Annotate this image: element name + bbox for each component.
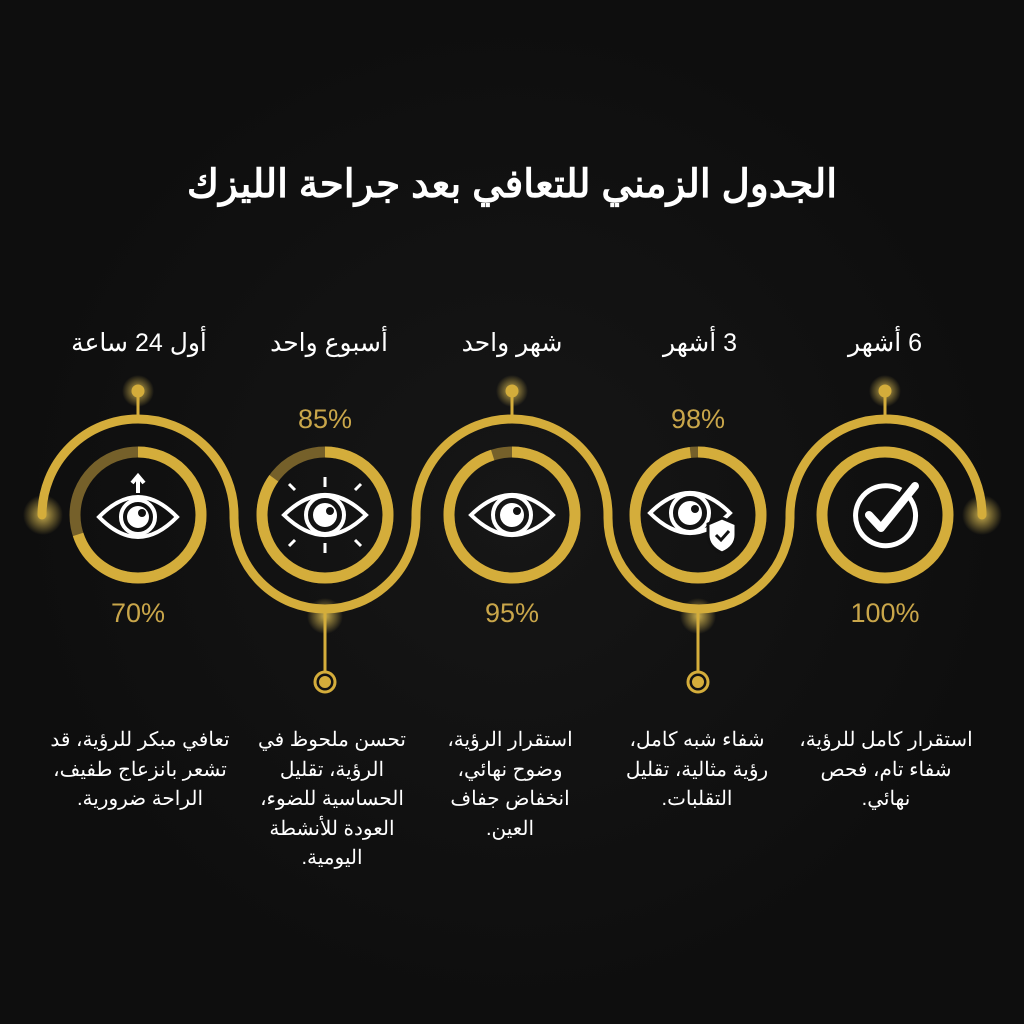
description 2: الرؤية، تقليل [280,758,384,780]
progress ring 5 [822,452,948,578]
description 2: تحسن ملحوظ في [258,729,406,751]
percent 70: 70% [111,598,165,628]
wave path [23,375,1002,692]
description 4: التقلبات. [662,788,732,810]
description 2: الحساسية للضوء، [260,788,404,810]
description 5: استقرار كامل للرؤية، [799,729,973,751]
description 3 [447,729,573,840]
description 4: شفاء شبه كامل، [630,729,764,751]
description 2: العودة للأنشطة [269,818,395,840]
percent 98: 98% [671,404,725,434]
description 1: تعافي مبكر للرؤية، قد [50,729,230,751]
heading: one week: أسبوع واحد [270,329,388,357]
icon: eye with shield [650,493,736,553]
icon: eye [471,495,553,535]
percent 100: 100% [850,598,920,628]
description 3: استقرار الرؤية، [447,729,573,751]
icon: check circle [856,486,916,546]
progress ring 2 [262,452,388,578]
description 2: اليومية. [301,847,363,869]
icon: eye with arrow [99,476,177,537]
description 5 [799,729,973,810]
icon: eye with rays [284,477,366,553]
description 3: العين. [486,818,534,840]
heading: 24 hours: أول 24 ساعة [71,329,207,357]
description 1: تشعر بانزعاج طفيف، [53,758,227,780]
progress ring 3 [449,452,575,578]
heading: 6 months: 6 أشهر [848,329,922,357]
description 1 [50,729,230,810]
progress ring 1 [75,452,201,578]
description 5: نهائي. [862,788,910,810]
percent 95: 95% [485,598,539,628]
heading: 3 months: 3 أشهر [663,329,737,357]
description 2 [258,729,406,869]
description 4: رؤية مثالية، تقليل [626,758,768,780]
description 3: انخفاض جفاف [450,788,570,810]
description 4 [626,729,768,810]
title: الجدول الزمني للتعافي بعد جراحة الليزك [187,163,837,206]
description 1: الراحة ضرورية. [77,788,203,810]
description 3: وضوح نهائي، [457,758,562,780]
heading: one month: شهر واحد [462,329,562,357]
percent 85: 85% [298,404,352,434]
description 5: شفاء تام، فحص [821,758,951,780]
progress ring 4 [635,452,761,578]
